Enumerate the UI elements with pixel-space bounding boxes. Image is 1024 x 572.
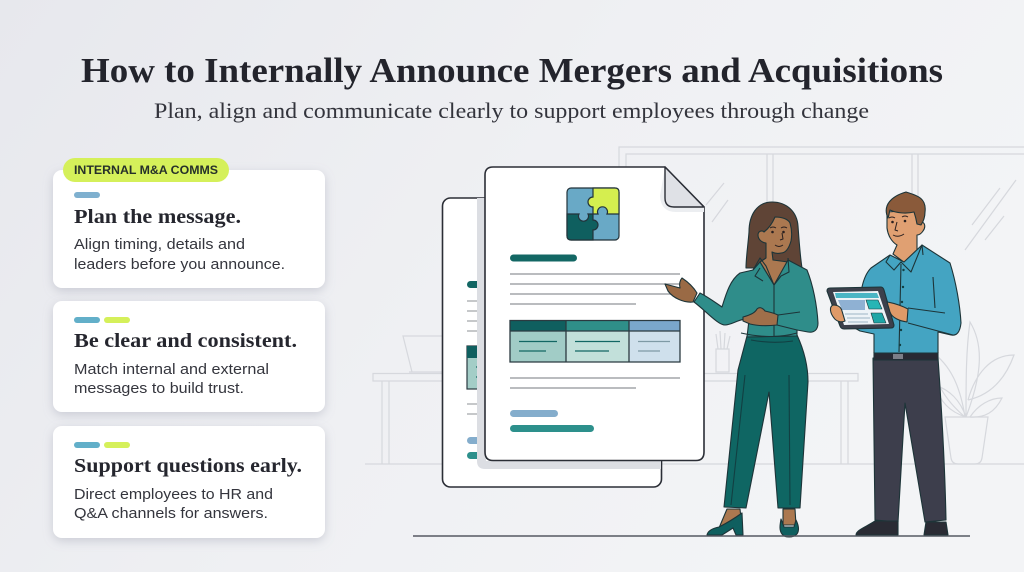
teal blouse [694, 260, 818, 337]
panel: be clear and consistent [53, 301, 325, 412]
panel: plan the message [53, 170, 325, 288]
badge: internal comms: INTERNAL M&A COMMS [74, 163, 218, 177]
card body: messages to build trust. [74, 380, 244, 397]
card body: Direct employees to HR and [74, 486, 273, 503]
heading bar [510, 254, 577, 262]
belt [874, 352, 938, 360]
card body: Q&A channels for answers. [74, 505, 268, 522]
hands [830, 302, 908, 322]
trousers [724, 335, 808, 508]
back document text lines [467, 301, 490, 414]
card heading: Support questions early. [74, 455, 302, 477]
face and neck [887, 210, 925, 263]
shoes and ankles [707, 509, 798, 537]
accent dashes [74, 317, 130, 323]
text lines [510, 274, 680, 388]
facial features [889, 216, 908, 236]
shoes [856, 521, 948, 535]
blue shirt [853, 245, 961, 353]
background office scene [365, 147, 1024, 464]
panel: support questions early [53, 426, 325, 538]
hair [886, 192, 925, 225]
back document [442, 198, 662, 487]
hair [746, 202, 802, 268]
table [510, 320, 680, 362]
shirt buttons [899, 269, 905, 346]
illustration: woman presenting [665, 202, 818, 537]
card heading: Be clear and consistent. [74, 330, 297, 352]
shirt details [886, 245, 953, 352]
front document [485, 167, 704, 460]
card heading: Plan the message. [74, 206, 241, 228]
trousers [873, 358, 946, 522]
accent dashes [74, 442, 130, 448]
trouser creases [731, 340, 793, 505]
tablet [827, 287, 894, 329]
title: How to Internally Announce Mergers and Acquisitions [81, 51, 943, 90]
facial features [770, 227, 787, 246]
card body: leaders before you announce. [74, 256, 285, 273]
accent dash [74, 192, 100, 198]
ground line [413, 535, 970, 537]
icon: jigsaw puzzle [567, 188, 619, 240]
back document bars [467, 437, 497, 459]
back document table [467, 346, 497, 389]
page fold [660, 167, 704, 212]
shadow of front document [477, 198, 661, 469]
card body: Match internal and external [74, 361, 269, 378]
hand on waist [743, 308, 778, 326]
blouse details [741, 258, 800, 336]
badge: internal comms [63, 158, 229, 182]
face and neck [758, 217, 792, 285]
bottom bars [510, 410, 594, 432]
illustration: man with tablet [827, 192, 961, 535]
subtitle: Plan, align and communicate clearly to support employees through change [154, 98, 869, 123]
pointing hand [665, 278, 697, 302]
card body: Align timing, details and [74, 236, 245, 253]
back document heading bar [467, 281, 497, 288]
